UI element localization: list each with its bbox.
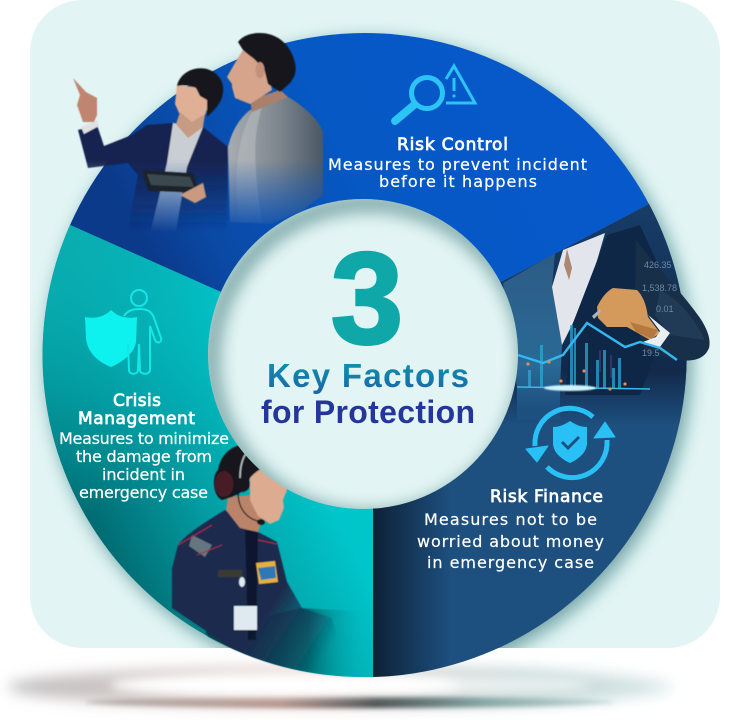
- id card: [234, 606, 257, 630]
- icon: shield and person outline: [85, 290, 161, 374]
- neck and face of man in grey shirt: [250, 90, 288, 112]
- white shirt and tie: [150, 123, 203, 235]
- hair: [214, 444, 285, 500]
- panel: crisis management segment: [43, 225, 373, 677]
- photo: businessman with financial chart: 19.5: [642, 348, 660, 358]
- hair of man in suit: [177, 68, 223, 117]
- shirt cuff: [643, 315, 670, 347]
- text: crisis management: Crisis: [113, 391, 161, 411]
- hand holding pen: [597, 288, 660, 340]
- face of man in suit: [175, 85, 210, 123]
- chart bars: [528, 325, 621, 388]
- desk area fading to teal: [205, 608, 372, 680]
- text: crisis management: Management: [78, 409, 195, 429]
- text: risk finance: worried about money: [417, 532, 604, 551]
- uniform: [172, 510, 340, 680]
- text: crisis management: incident in: [102, 465, 185, 484]
- photo: businessman with financial chart: [490, 200, 710, 425]
- text: crisis management: Measures to minimize: [59, 429, 229, 448]
- pointing hand: [73, 78, 97, 122]
- text: crisis management: [59, 391, 229, 502]
- hair of man in grey shirt: [238, 33, 296, 92]
- photo: businessman with financial chart: 0.01: [656, 304, 674, 314]
- neck: [226, 495, 262, 532]
- navy suit jacket: [78, 123, 228, 236]
- trend line: [518, 323, 677, 363]
- text: crisis management: the damage from: [76, 447, 212, 466]
- text: risk control: [328, 135, 587, 191]
- text: crisis management: emergency case: [79, 483, 208, 502]
- photo: businessman with financial chart: 426.35: [644, 260, 672, 270]
- headset: [234, 476, 250, 492]
- photo: security operator with headset: [172, 444, 372, 680]
- panel: risk finance segment: [363, 204, 687, 677]
- text: risk finance: Risk Finance: [490, 487, 603, 507]
- tablet: [142, 170, 200, 193]
- badge: [256, 561, 278, 584]
- jacket sleeve extending beyond ring: [635, 240, 710, 360]
- text: risk control: before it happens: [379, 172, 537, 191]
- icon: magnifier and warning triangle: [395, 66, 475, 121]
- photo: two businessmen looking up: [73, 33, 323, 236]
- text: risk finance: Measures not to be: [424, 510, 597, 529]
- face: [250, 466, 287, 524]
- title: for Protection: for Protection: [261, 394, 475, 430]
- photo: businessman with financial chart: 1,538.78: [642, 283, 677, 293]
- text: risk finance: [417, 487, 604, 572]
- floor shadow: [8, 666, 672, 708]
- centre circle: [208, 199, 527, 519]
- panel: risk control segment: [70, 33, 649, 355]
- icon: shield with cycle arrows: [526, 408, 615, 478]
- donut soft shadow: [47, 39, 691, 683]
- text: risk control: Risk Control: [397, 135, 508, 155]
- text: risk finance: in emergency case: [427, 553, 594, 572]
- big number 3: 3: [331, 225, 403, 371]
- text: risk control: Measures to prevent incident: [328, 155, 587, 174]
- title: Key Factors: Key Factors: [267, 357, 469, 394]
